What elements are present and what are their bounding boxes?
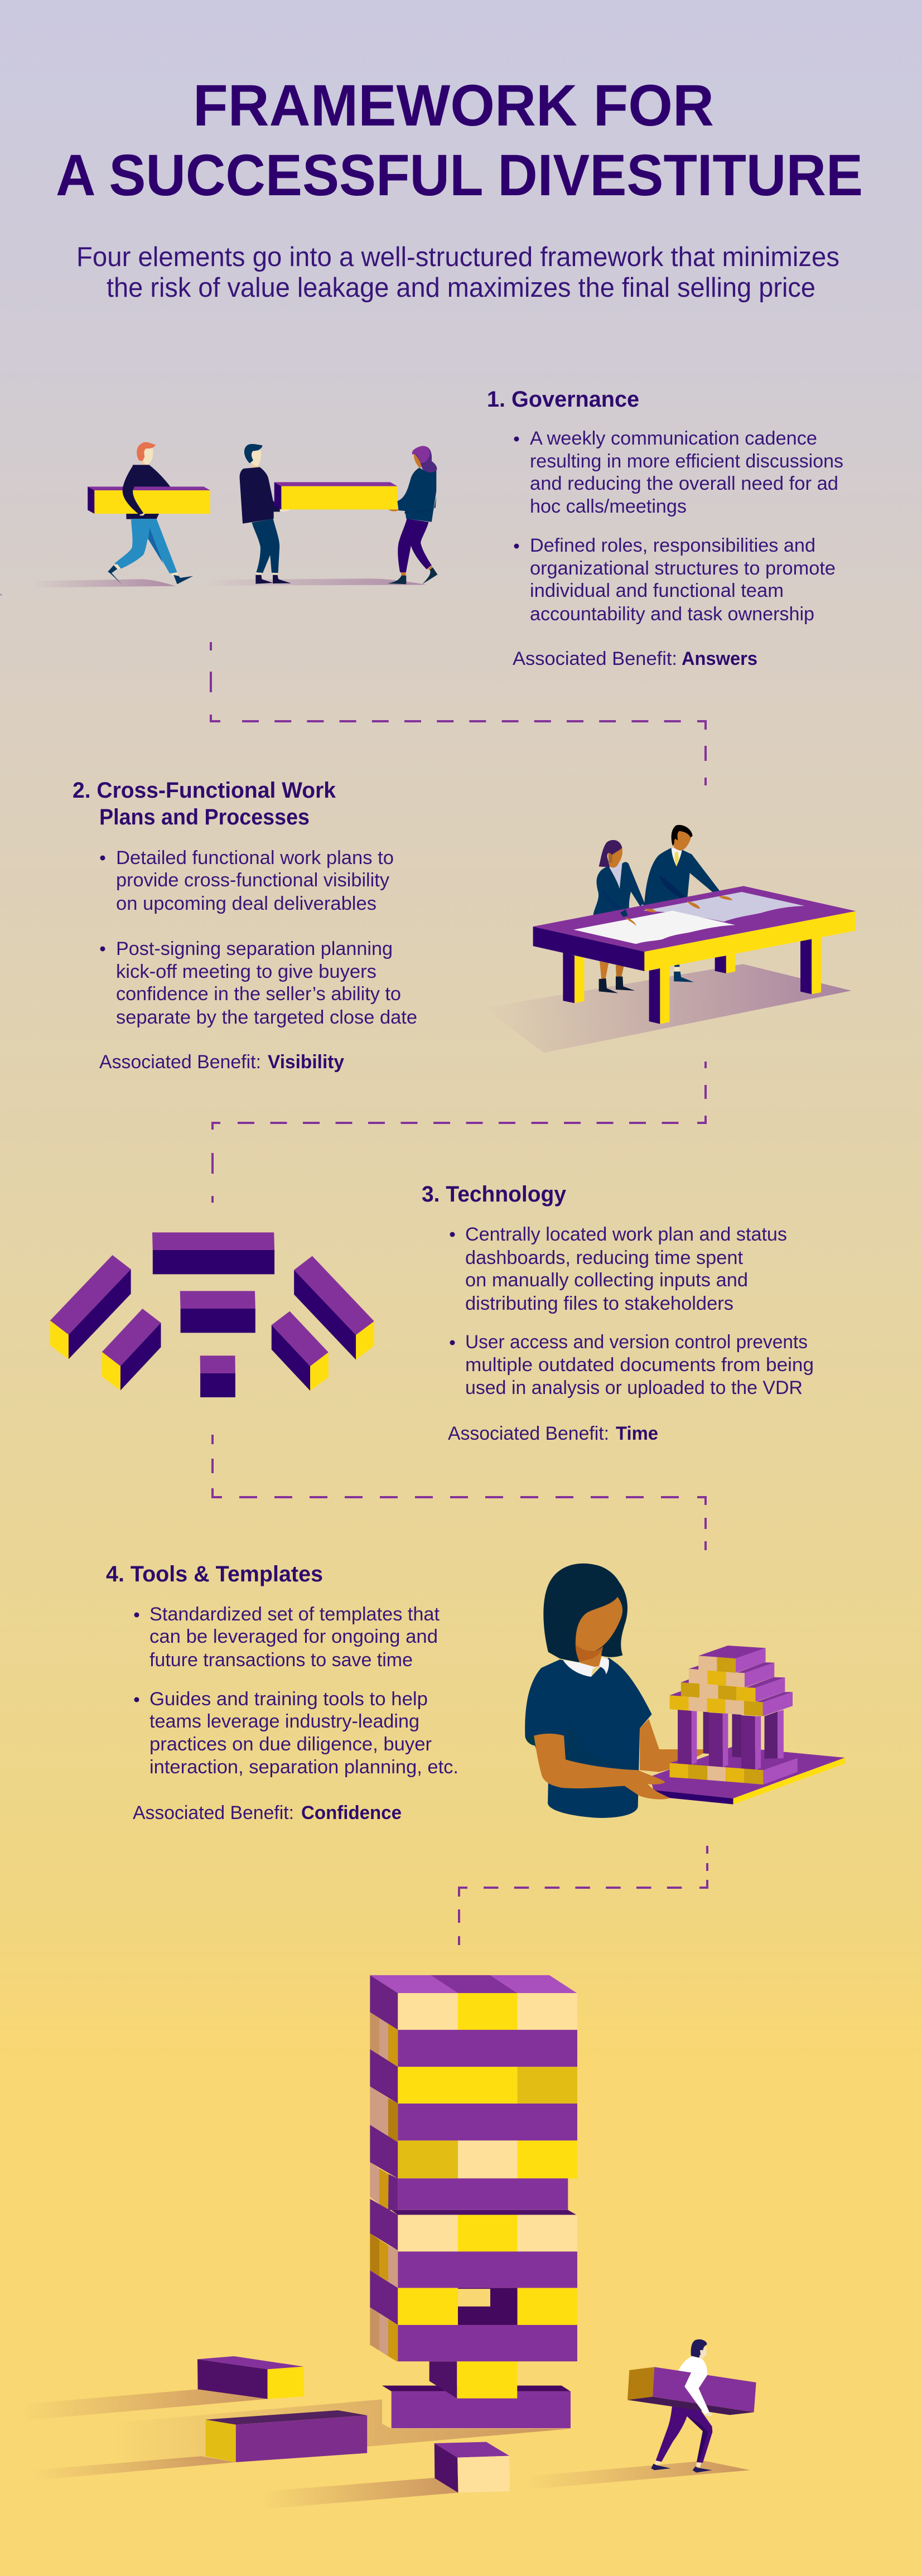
text block: technology bullets: multiple outdated documents from being (465, 1354, 814, 1376)
heading: cross-functional work plans and processes: Plans and Processes (99, 805, 310, 829)
text block: technology bullets: User access and version control prevents (465, 1332, 808, 1353)
text block: cross-functional bullets: confidence in the seller’s ability to (116, 983, 401, 1005)
block: left small (102, 1309, 161, 1391)
woman standing behind table (593, 840, 656, 993)
temple roof tiers (670, 1646, 793, 1716)
person 2 (240, 444, 291, 584)
text block: tools bullets: Standardized set of templates that (149, 1604, 440, 1625)
text block: governance bullets: and reducing the overall need for ad (530, 473, 838, 494)
benefit: visibility: Visibility (268, 1051, 344, 1073)
block carried by person 1 (88, 466, 210, 516)
person 1 (108, 442, 193, 584)
title: A SUCCESSFUL DIVESTITURE (56, 143, 863, 208)
benefit: answers (513, 648, 757, 669)
panel: ground shadows and loose blocks (21, 2356, 570, 2509)
text block: governance bullets: A weekly communication cadence (530, 428, 817, 449)
text block: cross-functional bullets (100, 847, 417, 1028)
text block: governance bullets: individual and functional team (530, 580, 784, 601)
benefit: answers: Associated Benefit: (513, 648, 677, 669)
text block: technology bullets: used in analysis or uploaded to the VDR (465, 1377, 803, 1398)
woman: forearm holding tray (534, 1734, 670, 1800)
person body (651, 2339, 712, 2473)
floor shadow (484, 964, 851, 1053)
text block: tools bullets: can be leveraged for ongoing and (149, 1626, 438, 1647)
benefit: confidence: Associated Benefit: (133, 1802, 294, 1824)
subtitle: Four elements go into a well-structured framework that minimizes (76, 242, 839, 272)
tower left face (370, 1975, 398, 2362)
dashed connector 4 (459, 1846, 707, 1945)
benefit: confidence (133, 1802, 402, 1824)
text block: governance bullets: Defined roles, responsibilities and (530, 535, 815, 556)
carried block (627, 2367, 756, 2415)
benefit: visibility: Associated Benefit: (99, 1051, 261, 1073)
man standing behind table (644, 825, 732, 982)
text block: cross-functional bullets: Detailed functional work plans to (116, 847, 394, 869)
benefit: time: Associated Benefit: (448, 1423, 609, 1444)
block: top centre (152, 1232, 274, 1274)
benefit: visibility (99, 1051, 344, 1073)
title: FRAMEWORK FOR (193, 73, 714, 138)
ground shadows (0, 578, 427, 595)
text block: governance bullets (514, 428, 843, 625)
text block: technology bullets: Centrally located work plan and status (465, 1224, 787, 1245)
person shadow (526, 2461, 750, 2490)
heading: cross-functional work plans and processes: 2. Cross-Functional Work (73, 778, 336, 803)
panel: illustration, two people at a table (484, 825, 856, 1053)
block: middle centre (180, 1291, 255, 1333)
text block: tools bullets (134, 1604, 458, 1778)
text block: governance bullets: organizational structures to promote (530, 558, 836, 579)
block: right large (294, 1256, 374, 1360)
block: bottom centre (200, 1355, 235, 1397)
loose block C (435, 2442, 510, 2493)
panel: person carrying a block away (526, 2339, 756, 2490)
tower base block (382, 2361, 571, 2428)
tower front face rows (392, 1993, 577, 2361)
title (56, 73, 863, 208)
text block: governance bullets: hoc calls/meetings (530, 496, 687, 517)
block carried between persons 2 and 3 (274, 482, 397, 509)
text block: tools bullets: Guides and training tools to help (149, 1689, 428, 1710)
benefit: confidence: Confidence (301, 1802, 402, 1824)
tray (650, 1747, 845, 1805)
text block: tools bullets: future transactions to save time (149, 1649, 413, 1671)
text block: governance bullets: resulting in more efficient discussions (530, 451, 843, 472)
text block: cross-functional bullets: separate by the targeted close date (116, 1007, 417, 1028)
dashed connector 3 (213, 1435, 706, 1550)
woman: hair, face and shirt (525, 1564, 703, 1818)
loose block B (206, 2410, 367, 2462)
subtitle (76, 242, 839, 303)
text block: tools bullets: practices on due diligence, buyer (149, 1734, 432, 1755)
dashed connector 2 (213, 1062, 706, 1203)
panel: governance illustration, people carrying blocks (0, 442, 437, 595)
heading: tools and templates: 4. Tools & Templates (106, 1562, 323, 1586)
text block: tools bullets: interaction, separation planning, etc. (149, 1757, 458, 1778)
block: left large (50, 1255, 131, 1359)
text block: tools bullets: teams leverage industry-leading (149, 1711, 419, 1732)
text block: technology bullets: dashboards, reducing time spent (465, 1247, 744, 1268)
block: right small (272, 1311, 329, 1391)
text block: technology bullets: distributing files to stakeholders (465, 1293, 733, 1314)
ground shadows (21, 2389, 570, 2509)
text block: technology bullets (450, 1224, 814, 1398)
text block: governance bullets: accountability and task ownership (530, 604, 814, 625)
person 3 (388, 446, 437, 584)
text block: cross-functional bullets: Post-signing separation planning (116, 938, 393, 959)
benefit: answers: Answers (682, 648, 757, 669)
person arm over block (684, 2372, 712, 2416)
panel: block tower (370, 1975, 577, 2428)
text block: technology bullets: on manually collecting inputs and (465, 1270, 748, 1291)
panel: tools illustration, woman holding temple model (525, 1564, 845, 1818)
text block: cross-functional bullets: on upcoming deal deliverables (116, 893, 376, 914)
dashed connector 1 (211, 642, 706, 785)
loose block A (197, 2356, 304, 2399)
table (533, 886, 856, 1024)
text block: cross-functional bullets: kick-off meeting to give buyers (116, 961, 376, 982)
panel: technology illustration, arc of blocks (50, 1232, 374, 1397)
tower top face (370, 1975, 577, 1993)
benefit: time: Time (616, 1423, 658, 1444)
heading: technology: 3. Technology (422, 1182, 567, 1207)
heading: cross-functional work plans and processes (73, 778, 336, 829)
subtitle: the risk of value leakage and maximizes the final selling price (107, 273, 815, 303)
text block: cross-functional bullets: provide cross-functional visibility (116, 870, 389, 891)
temple columns and base (670, 1710, 798, 1784)
heading: governance: 1. Governance (487, 387, 639, 412)
